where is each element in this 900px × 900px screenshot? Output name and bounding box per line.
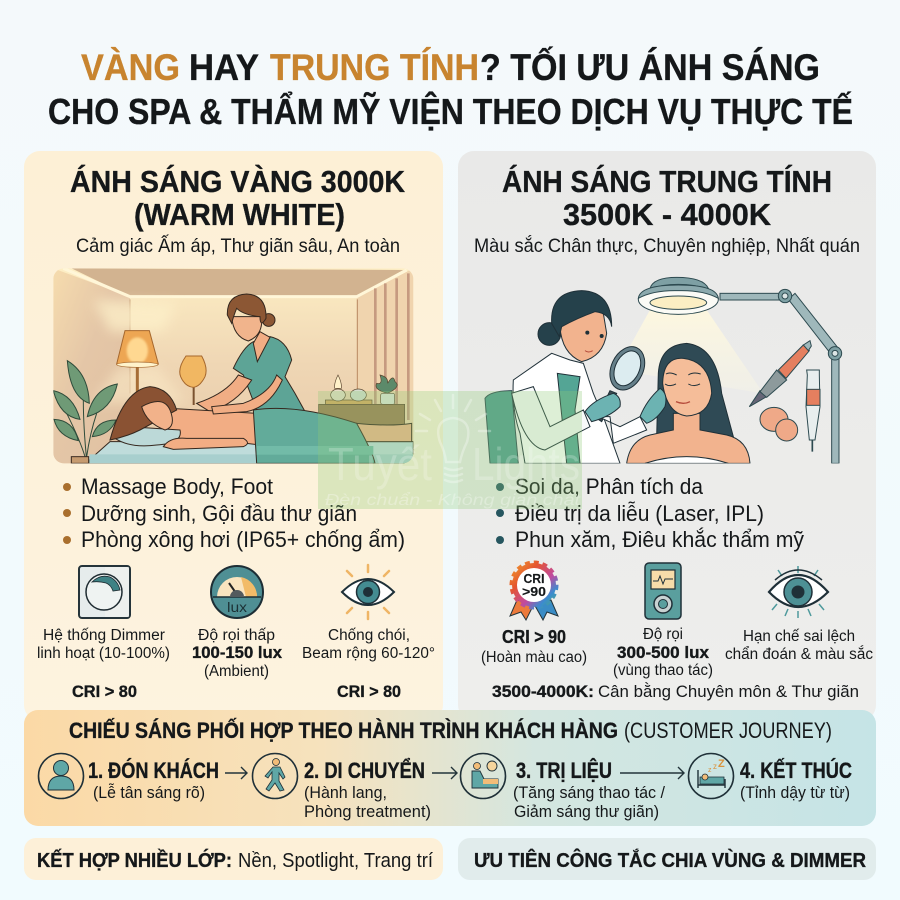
title: [48, 46, 853, 132]
tools: [749, 341, 820, 452]
step 4: [688, 754, 852, 802]
bullet list: warm services: Phòng xông hơi (IP65+ chống ẩm): [81, 527, 405, 552]
doctor arm and gloves: [585, 388, 666, 443]
heading: neutral light: 3500K - 4000K: [563, 197, 772, 232]
chair: [485, 391, 518, 463]
title: HAY: [189, 47, 259, 88]
callout: zone switches and dimmer: [458, 838, 876, 880]
bullet list: warm services: Dưỡng sinh, Gội đầu thư giãn: [81, 501, 357, 526]
watermark: Đèn chuẩn - Không gian chất: [325, 491, 581, 509]
journey heading: CHIẾU SÁNG PHỐI HỢP THEO HÀNH TRÌNH KHÁCH HÀNG: [69, 717, 618, 743]
icon: anti-glare eye: [342, 565, 394, 619]
therapist: [197, 294, 306, 413]
journey heading: (CUSTOMER JOURNEY): [624, 718, 832, 743]
curtain: [375, 273, 408, 420]
step 3: Giảm sáng thư giãn): [514, 803, 659, 821]
step 3: 3. TRỊ LIỆU: [516, 758, 612, 783]
text: illuminance: Độ rọi: [643, 626, 683, 643]
text: anti-glare: Chống chói,: [328, 627, 410, 644]
plant: [53, 361, 117, 460]
text: anti-glare: Beam rộng 60-120°: [302, 645, 435, 662]
text: limit errors: [725, 628, 873, 663]
text: limit errors: Hạn chế sai lệch: [743, 628, 855, 645]
client head, hair, pillow, arm: [115, 428, 180, 446]
arrow 3 to 4: [620, 767, 684, 779]
step 4: z: [708, 767, 712, 774]
title: TRUNG TÍNH: [270, 47, 479, 88]
text: dimmer: Hệ thống Dimmer: [43, 627, 165, 644]
illustration: massage room: [53, 268, 413, 463]
heading: neutral light: [474, 164, 860, 257]
CRI left: CRI > 80: [72, 682, 137, 701]
bullet list: neutral services: Soi da, Phân tích da: [515, 474, 704, 499]
bullet list: neutral services: Điều trị da liễu (Laser, IPL): [515, 501, 764, 526]
icon: lux meter: [645, 563, 681, 619]
bed: [89, 442, 413, 463]
text: anti-glare: [302, 627, 435, 662]
step 4: z: [713, 762, 717, 771]
step 1: [38, 754, 219, 802]
text: CRI: CRI > 90: [502, 627, 566, 647]
icon: lux gauge: [211, 566, 263, 618]
lamp arm: [638, 277, 842, 463]
text: lux: (Ambient): [204, 663, 269, 680]
heading: neutral light: Màu sắc Chân thực, Chuyên nghiệp, Nhất quán: [474, 234, 860, 257]
candles and cabinet: [319, 375, 405, 428]
step 1: 1. ĐÓN KHÁCH: [88, 758, 219, 783]
bullet list: warm services: [63, 474, 405, 552]
text: lux: Độ rọi thấp: [198, 627, 275, 644]
text: illuminance: (vùng thao tác): [613, 662, 713, 679]
step 2: (Hành lang,: [304, 784, 387, 802]
step 2: Phòng treatment): [304, 803, 431, 821]
therapist forearm: [212, 375, 282, 414]
step 4: (Tỉnh dậy từ từ): [740, 784, 850, 802]
heading: warm light: [70, 164, 406, 257]
panel: neutral 3500K-4000K: [458, 151, 876, 721]
heading: warm light: ÁNH SÁNG VÀNG 3000K: [70, 164, 406, 199]
table lamp: [192, 388, 195, 405]
title: ? TỐI ƯU ÁNH SÁNG: [480, 46, 820, 88]
text: balance note: Cân bằng Chuyên môn & Thư giãn: [598, 682, 859, 701]
text: lux: 100-150 lux: [192, 643, 283, 662]
text: limit errors: chẩn đoán & màu sắc: [725, 646, 873, 663]
step 4: Z: [718, 758, 725, 770]
watermark: Tuyết: [328, 438, 432, 490]
heading: warm light: (WARM WHITE): [134, 197, 345, 232]
step 4: 4. KẾT THÚC: [740, 758, 852, 783]
text: CRI: [481, 627, 587, 666]
callout: layered lighting: [24, 838, 443, 880]
step 3: (Tăng sáng thao tác /: [513, 784, 665, 802]
title: VÀNG: [81, 47, 180, 88]
panel: customer journey: [24, 710, 876, 826]
heading: warm light: Cảm giác Ấm áp, Thư giãn sâu, An toàn: [76, 234, 400, 257]
text: balance note: 3500-4000K:: [492, 682, 594, 701]
client legs and towel: [357, 423, 412, 442]
icon: dimmer: [79, 566, 130, 618]
heading: neutral light: ÁNH SÁNG TRUNG TÍNH: [502, 164, 832, 199]
floor lamp: [136, 368, 139, 392]
icon: lux gauge: lux: [227, 599, 247, 615]
text: CRI: (Hoàn màu cao): [481, 649, 587, 666]
bullet list: neutral services: [496, 474, 804, 552]
text: illuminance: 300-500 lux: [617, 643, 710, 662]
arrow 2 to 3: [432, 767, 457, 779]
text: dimmer: linh hoạt (10-100%): [37, 645, 170, 662]
doctor: [512, 291, 651, 463]
watermark: Lights: [472, 438, 580, 490]
icon: CRI badge: CRI: [524, 571, 544, 586]
illustration: skin clinic: [485, 277, 842, 463]
callout: layered lighting: Nền, Spotlight, Trang trí: [238, 850, 433, 872]
callout: layered lighting: KẾT HỢP NHIỀU LỚP:: [37, 848, 232, 872]
text: dimmer: [37, 627, 170, 662]
icon: CRI badge: [510, 562, 558, 620]
panel: warm white 3000K: [24, 151, 443, 721]
icon: CRI badge: >90: [522, 584, 546, 599]
patient: [627, 343, 750, 463]
text: lux: [192, 627, 283, 680]
step 1: (Lễ tân sáng rõ): [93, 783, 205, 802]
text: illuminance: [613, 626, 713, 679]
beam of light: [630, 310, 745, 368]
callout: zone switches and dimmer: ƯU TIÊN CÔNG TẮC CHIA VÙNG & DIMMER: [474, 848, 867, 872]
step 3: [460, 754, 665, 821]
watermark: [318, 391, 582, 509]
CRI right: CRI > 80: [337, 682, 401, 701]
bullet list: warm services: Massage Body, Foot: [81, 474, 273, 499]
light glow: [93, 300, 177, 332]
step 2: [252, 754, 431, 821]
step 2: 2. DI CHUYỂN: [304, 758, 425, 783]
arrow 1 to 2: [225, 767, 247, 779]
icon: precise eye: [769, 566, 828, 618]
bullet list: neutral services: Phun xăm, Điêu khắc thẩm mỹ: [515, 527, 804, 552]
